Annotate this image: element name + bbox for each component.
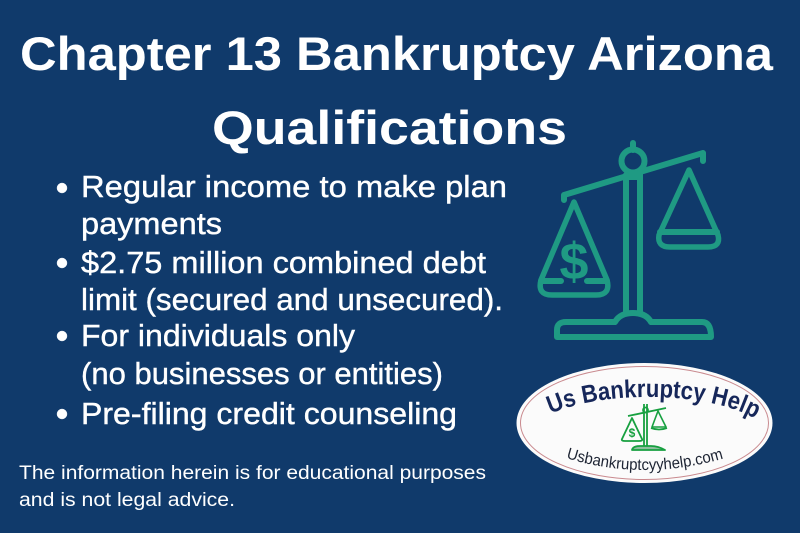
logo name curved text: Us Bankruptcy Help: [546, 379, 759, 420]
bullet: regular income: [57, 169, 507, 241]
logo url curved text: Usbankruptcyyhelp.com: [568, 448, 723, 474]
right pan: [659, 170, 719, 247]
left pan: [540, 202, 608, 295]
disclaimer: [19, 463, 486, 511]
logo scale icon: [622, 404, 667, 450]
disclaimer: The information herein is for educational purposes: [19, 463, 486, 484]
logo ellipse: [516, 363, 772, 483]
title: Qualifications: [212, 101, 567, 154]
icon: dollar sign: $: [560, 233, 589, 291]
logo scale icon: $: [629, 426, 636, 440]
title: Chapter 13 Bankruptcy Arizona: [20, 27, 774, 80]
qualifications bullet list: [57, 169, 507, 431]
bullet: individuals only: [57, 318, 443, 391]
bullet: debt limit: $2.75 million combined debt: [81, 245, 486, 280]
bullet: credit counseling: Pre-filing credit counseling: [81, 396, 457, 431]
bullet: debt limit: [57, 245, 503, 317]
bullet: individuals only: For individuals only: [81, 318, 356, 353]
bullet: individuals only: (no businesses or entities): [81, 356, 443, 391]
title: [20, 27, 774, 154]
bullet: regular income: payments: [81, 206, 222, 241]
logo badge: [516, 363, 772, 483]
bullet: regular income: Regular income to make plan: [81, 169, 507, 204]
bullet: debt limit: limit (secured and unsecured).: [81, 282, 503, 317]
disclaimer: and is not legal advice.: [19, 490, 235, 511]
icon: balance scale with dollar sign: [540, 143, 719, 337]
